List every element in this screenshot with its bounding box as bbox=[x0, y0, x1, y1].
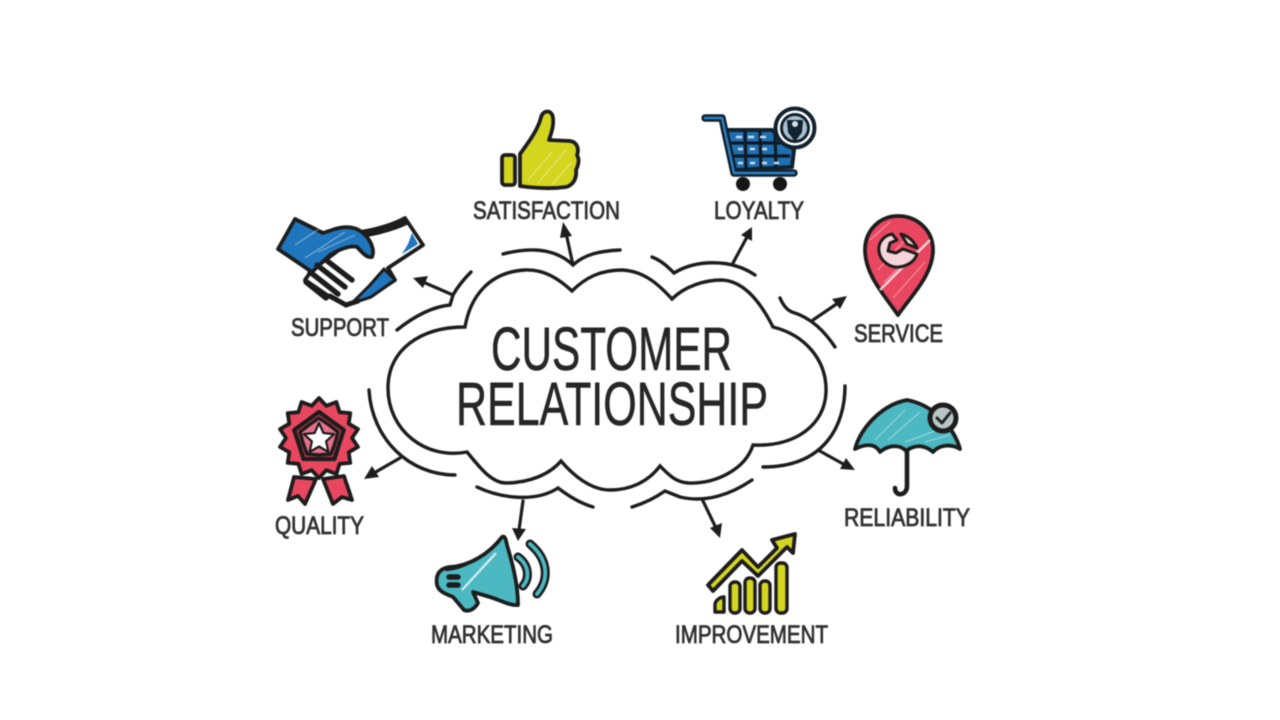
outer arc and arrow: marketing bbox=[477, 487, 593, 541]
icon: award ribbon badge bbox=[280, 398, 358, 504]
icon: location pin with wrench bbox=[865, 216, 933, 315]
icon: shopping cart bbox=[705, 108, 814, 191]
outer arc and arrow: loyalty bbox=[652, 227, 755, 275]
label: satisfaction: SATISFACTION bbox=[473, 197, 620, 225]
outer arc and arrow: reliability bbox=[763, 386, 855, 470]
outer arc and arrow: improvement bbox=[632, 480, 752, 538]
title: customer relationship: RELATIONSHIP bbox=[456, 370, 768, 438]
label: reliability: RELIABILITY bbox=[844, 504, 970, 532]
outer arc and arrow: quality bbox=[364, 390, 455, 479]
icon: handshake bbox=[278, 218, 423, 305]
label: support: SUPPORT bbox=[291, 314, 389, 342]
icon: megaphone bbox=[437, 537, 545, 611]
outer arc and arrow: satisfaction bbox=[503, 222, 620, 265]
outer arc and arrow: service bbox=[780, 296, 847, 347]
icon: umbrella with check badge bbox=[855, 400, 960, 494]
label: improvement: IMPROVEMENT bbox=[675, 621, 828, 649]
icon: thumbs up bbox=[502, 112, 579, 188]
label: service: SERVICE bbox=[854, 320, 943, 348]
title: customer relationship bbox=[456, 315, 768, 438]
label: loyalty: LOYALTY bbox=[714, 197, 804, 225]
title: customer relationship: CUSTOMER bbox=[491, 315, 732, 383]
central cloud bbox=[388, 270, 826, 490]
icon: growth chart with arrow bbox=[708, 534, 795, 613]
label: marketing: MARKETING bbox=[431, 621, 553, 649]
label: quality: QUALITY bbox=[275, 512, 364, 540]
outer arc and arrow: support bbox=[397, 272, 471, 330]
